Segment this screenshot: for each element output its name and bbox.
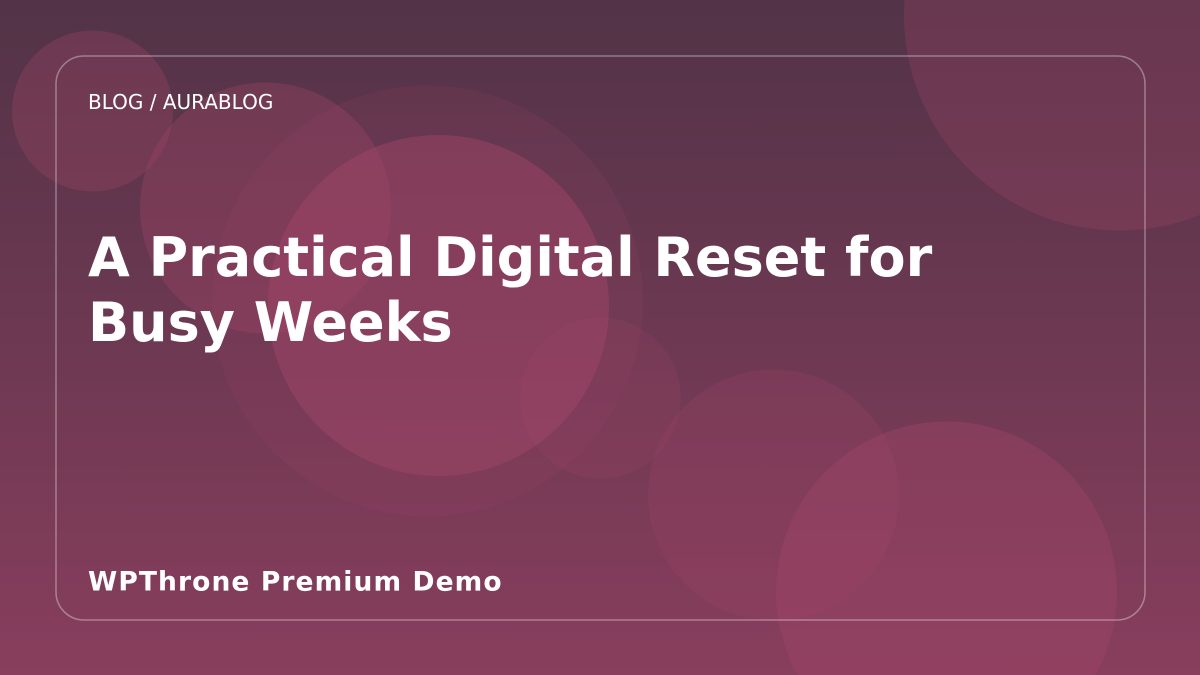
frame xyxy=(56,56,1145,620)
title: A Practical Digital Reset for xyxy=(88,226,933,289)
title xyxy=(88,226,933,354)
title: Busy Weeks xyxy=(88,291,453,354)
eyebrow label: BLOG / AURABLOG xyxy=(88,90,273,114)
footer brand: WPThrone Premium Demo xyxy=(88,566,503,598)
